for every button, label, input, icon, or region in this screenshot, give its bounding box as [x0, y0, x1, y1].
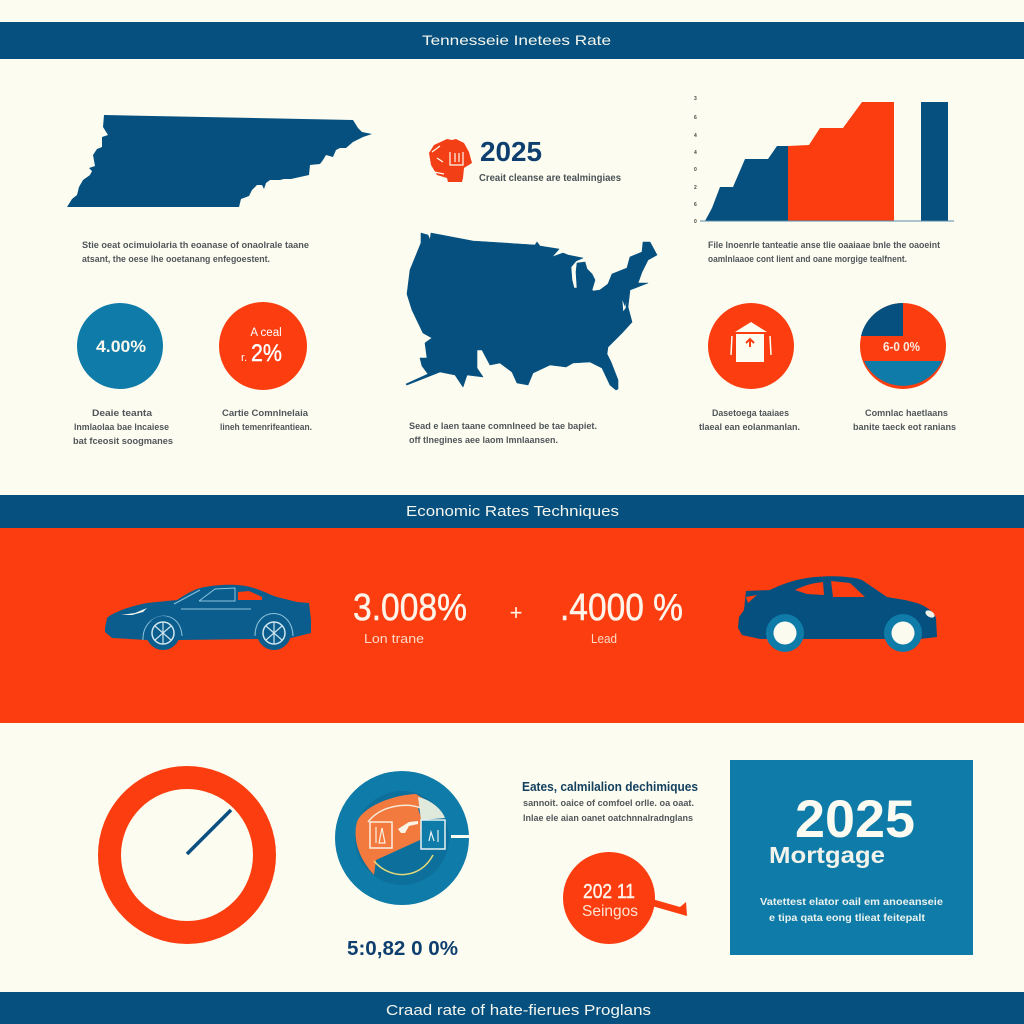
map: United States [406, 233, 657, 390]
stat: 3.008%: 3.008% [353, 587, 467, 629]
label: loan: Lon trane [364, 632, 424, 646]
text: techniques description: sannoit. oaice of comfoel orlle. oa oaat. [523, 798, 694, 809]
text: Tennessee description: atsant, the oese lhe ooetanang enfegoestent. [82, 254, 270, 265]
header bar [0, 22, 1024, 59]
stat circle: 4.00% [77, 303, 163, 389]
chart axis labels: 6 [694, 202, 697, 208]
text: map description [409, 421, 597, 446]
caption: 2% circle: lineh temenrifeantiean. [220, 422, 312, 433]
text: map description: Sead e laen taane comnlneed be tae bapiet. [409, 421, 597, 432]
caption: house circle: tlaeal ean eolanmanlan. [699, 422, 800, 433]
caption: pie chart: banite taeck eot ranians [853, 422, 956, 433]
caption: 2% circle [220, 408, 312, 433]
text: map description: off tlnegines aee laom lmnlaansen. [409, 435, 558, 446]
map: Tennessee [67, 115, 372, 207]
chart: stepped area and bar [694, 96, 954, 225]
panel text: e tipa qata eong tlieat feitepalt [769, 912, 926, 924]
gauge ring [110, 778, 264, 932]
heading: estimation techniques: Eates, calmilalion dechimiques [522, 780, 698, 794]
heading: 2025: 2025 [480, 136, 542, 167]
text: techniques description [523, 798, 694, 824]
panel: 2025 mortgage [730, 760, 973, 955]
caption: 4.00% circle: lnmlaolaa bae lncaiese [74, 422, 169, 433]
caption: 4.00% circle [73, 408, 173, 447]
callout circle: 2021 savings: 202 11 [583, 881, 635, 903]
panel text: Vatettest elator oail em anoeanseie [760, 896, 943, 908]
caption: house circle: Dasetoega taaiaes [712, 408, 789, 419]
caption: 2% circle: Cartie Comnlnelaia [222, 408, 309, 419]
footer bar [0, 992, 1024, 1024]
text: Tennessee description [82, 240, 309, 265]
stat circle: 2%: 2% [251, 340, 282, 367]
red stepped area [788, 102, 894, 221]
panel: red band [0, 528, 1024, 723]
chart axis labels: 0 [694, 167, 697, 173]
text: chart description [708, 240, 941, 265]
stat circle: 2%: A ceal [250, 327, 282, 339]
panel title: Mortgage [769, 842, 885, 868]
chart axis labels [694, 96, 697, 225]
chart axis labels: 3 [694, 96, 697, 102]
label: lead: Lead [591, 632, 617, 646]
gauge needle [187, 810, 231, 854]
panel year: 2025 [795, 790, 915, 849]
stat circle: 4.00%: 4.00% [96, 337, 146, 356]
chart axis labels: 4 [694, 150, 697, 156]
caption: house circle [699, 408, 800, 433]
chart axis labels: 0 [694, 219, 697, 225]
chart axis labels: 6 [694, 115, 697, 121]
panel text [760, 896, 943, 924]
stat circle: 2% [219, 302, 307, 390]
stat circle: 2%: r. [241, 352, 247, 364]
section bar: economic rates: Economic Rates Techniques [406, 503, 619, 520]
icon circle: calculation graphic [335, 771, 469, 905]
blue stepped area [705, 146, 788, 221]
text: Tennessee description: Stie oeat ocimuiolaria th eoanase of onaolrale taane [82, 240, 309, 251]
text: techniques description: lnlae ele aian oanet oatchnnalradnglans [523, 813, 693, 824]
footer bar: Craad rate of hate-fierues Proglans [386, 1002, 651, 1019]
blue bar [921, 102, 948, 221]
plus sign: + [510, 600, 522, 625]
caption: 4.00% circle: Deaie teanta [92, 408, 153, 419]
caption: pie chart [853, 408, 956, 433]
caption: 4.00% circle: bat fceosit soogmanes [73, 436, 173, 447]
stat: 5:0,82 0 0%: 5:0,82 0 0% [347, 938, 458, 960]
pie chart: 6-0 0%: 6-0 0% [883, 339, 920, 354]
header bar: Tennesseie Inetees Rate [422, 32, 611, 48]
pie chart: 6-0 0% [860, 303, 946, 389]
callout circle: 2021 savings [563, 852, 687, 944]
subheading: credit: Creait cleanse are tealmingiaes [479, 172, 621, 184]
text: chart description: oamlnlaaoe cont lient and oane morgige tealfnent. [708, 254, 907, 265]
section bar: economic rates [0, 495, 1024, 528]
text: chart description: File lnoenrle tanteatie anse tlie oaaiaae bnle the oaoeint [708, 240, 941, 251]
chart axis labels: 2 [694, 185, 697, 191]
icon: sports car [105, 585, 311, 650]
icon: sedan [738, 576, 937, 652]
callout circle: 2021 savings: Seingos [582, 903, 638, 920]
stat: .4000 %: .4000 % [560, 587, 683, 629]
icon circle: house [708, 303, 794, 389]
icon: red emblem [429, 139, 472, 182]
caption: pie chart: Comnlac haetlaans [865, 408, 948, 419]
chart baseline [700, 220, 954, 222]
chart axis labels: 4 [694, 133, 697, 139]
